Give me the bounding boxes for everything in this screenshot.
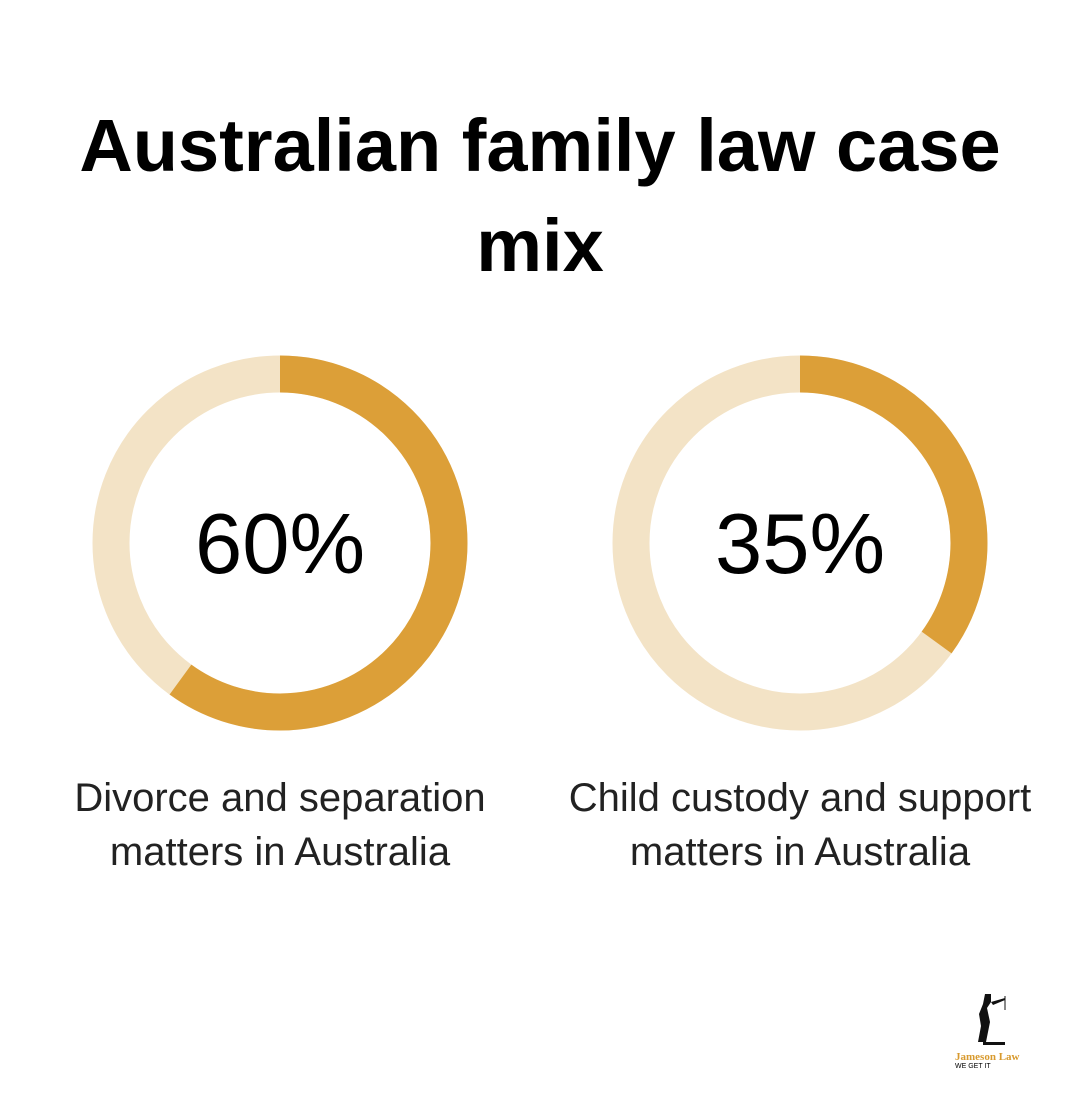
label: divorce <box>74 776 486 874</box>
title: mix <box>476 204 604 287</box>
donut chart: 35% <box>612 356 988 730</box>
text: WE GET IT <box>955 1063 991 1070</box>
label: divorce: Divorce and separation <box>74 776 486 820</box>
donut chart: 35%: 35% <box>715 497 885 592</box>
title: Australian family law case <box>79 104 1001 187</box>
label: child custody: Child custody and support <box>569 776 1031 820</box>
label: divorce: matters in Australia <box>110 830 450 874</box>
label: child custody <box>569 776 1031 874</box>
donut chart: 60% <box>92 356 468 730</box>
logo: Jameson Law: Jameson Law <box>955 1051 1019 1063</box>
donut chart: 60%: 60% <box>195 497 365 592</box>
label: child custody: matters in Australia <box>630 830 970 874</box>
logo: Jameson Law <box>955 994 1020 1070</box>
title <box>79 104 1001 287</box>
